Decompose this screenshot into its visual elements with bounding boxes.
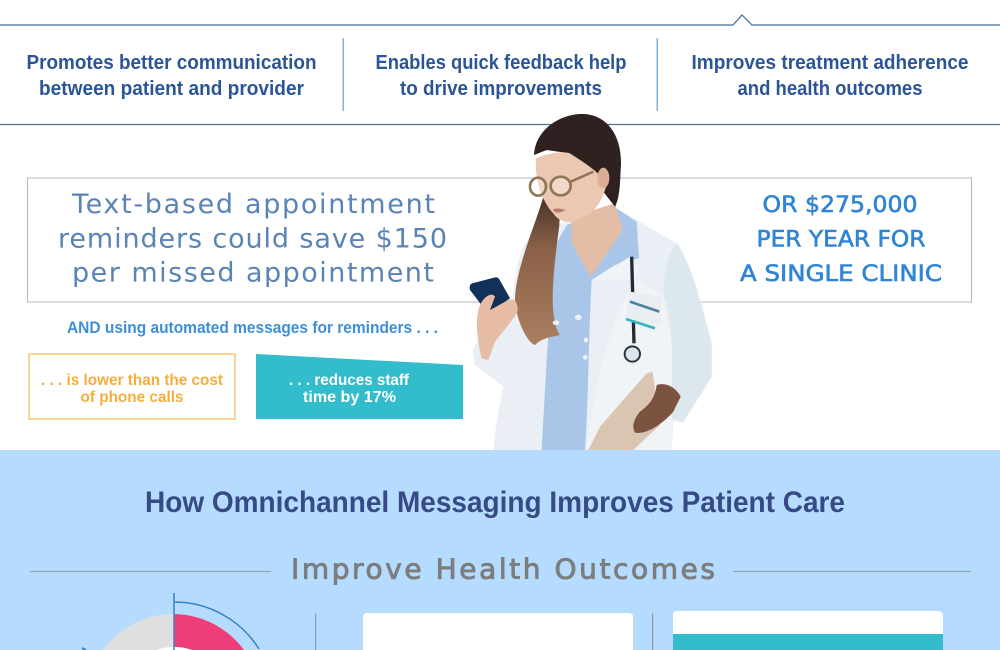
face [536,152,607,222]
savings statement: reminders could save $150 [58,224,447,254]
white card [363,613,633,650]
ear [597,168,609,188]
benefit: feedback [376,52,626,100]
mouth [553,208,565,213]
panel background [0,450,1000,650]
donut chart [82,593,259,650]
divider one [342,38,344,111]
stethoscope [625,257,640,362]
lab coat [473,208,712,450]
clinic savings statement: A SINGLE CLINIC [740,262,942,287]
neck [572,203,623,277]
benefit: communication [26,52,316,100]
right hand [633,384,681,433]
callout: staff time: . . . reduces staff [289,372,410,389]
coat lapel [587,257,672,450]
callout: staff time: time by 17% [303,389,396,406]
clinic savings statement: OR $275,000 [762,193,918,218]
benefit: adherence [692,52,968,100]
shirt buttons [553,315,588,360]
clinic savings statement [740,193,942,287]
panel title: How Omnichannel Messaging Improves Patient Care [145,486,845,519]
phone [470,277,510,314]
benefit: adherence: and health outcomes [738,78,922,100]
savings statement: per missed appointment [72,258,434,288]
clipboard [588,372,660,450]
name badge [625,292,663,328]
automated messages lead-in: AND using automated messages for reminders . . . [67,318,438,337]
coat shading [658,243,712,423]
long hair [515,197,560,345]
panel: how omnichannel improves care [0,450,1000,650]
divider two [656,38,658,111]
callout: lower cost [29,354,235,419]
teal card [673,611,943,650]
benefit: feedback: to drive improvements [400,78,602,100]
column divider right [652,613,653,650]
benefit: communication: between patient and provider [39,78,304,100]
bottom rule [0,124,1000,126]
callout: lower cost: . . . is lower than the cost [41,372,224,389]
glasses [530,172,593,196]
dark hair [534,114,621,207]
savings box outline [28,178,972,302]
benefit: communication: Promotes better communication [26,52,316,74]
clinic savings statement: PER YEAR FOR [756,228,926,252]
savings statement [58,189,447,288]
benefit: adherence: Improves treatment adherence [692,52,968,74]
column divider left [315,613,316,650]
benefit: feedback: Enables quick feedback help [376,52,626,74]
callout: lower cost: of phone calls [80,389,184,406]
savings statement: Text-based appointment [71,189,435,220]
section heading: Improve Health Outcomes [291,552,715,586]
callout: staff time [256,354,463,419]
left hand [477,295,518,360]
illustration: doctor reading phone [470,114,712,450]
top rule with notch [0,15,1000,25]
blue shirt [542,208,639,450]
panel: three benefits [0,15,1000,124]
